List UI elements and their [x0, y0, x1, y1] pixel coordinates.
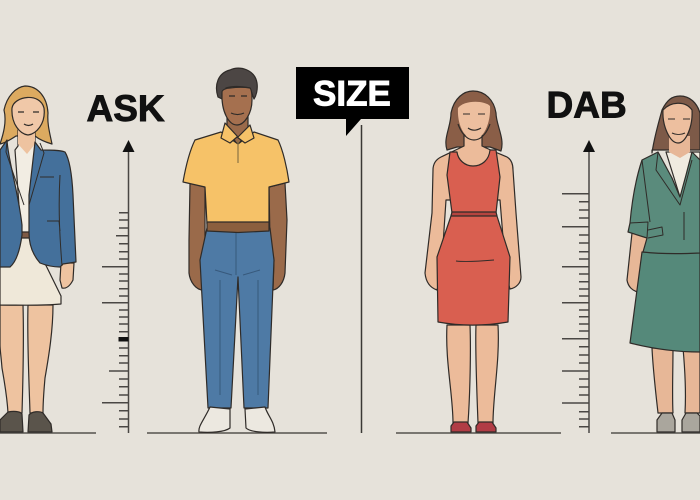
- shoes: [199, 407, 275, 432]
- belt: [21, 232, 31, 238]
- legs: [0, 305, 53, 413]
- collar: [221, 123, 254, 143]
- face details: [668, 119, 690, 134]
- label: SIZE callout: [296, 67, 409, 136]
- dress: [437, 150, 510, 325]
- figure: man in yellow polo and blue trousers: [183, 68, 289, 432]
- heading: ASK: ASK: [86, 88, 165, 129]
- label: SIZE callout: SIZE: [313, 74, 391, 114]
- dress fold: [456, 260, 494, 261]
- face: [663, 103, 692, 143]
- legs: [447, 325, 498, 423]
- blazer details: [6, 140, 62, 266]
- blazer: [0, 140, 76, 267]
- neck: [669, 136, 690, 158]
- legs: [652, 348, 700, 413]
- figure: woman in blue blazer and cream skirt: [0, 86, 76, 432]
- shoes: [657, 413, 700, 432]
- jacket details: [630, 152, 692, 240]
- skirt: [0, 233, 61, 305]
- face details: [18, 112, 39, 126]
- hair: [446, 91, 502, 151]
- placket: [237, 140, 239, 163]
- shoes: [0, 411, 52, 432]
- face: [458, 102, 490, 140]
- ruler: left scale: [102, 140, 134, 433]
- neck: [227, 115, 248, 146]
- face details: [229, 96, 247, 114]
- belt: [207, 222, 269, 232]
- face: [12, 97, 44, 135]
- figure: woman in red dress: [425, 91, 521, 432]
- belt: [451, 212, 497, 216]
- neck, shoulders and arms: [425, 135, 521, 290]
- face details: [463, 114, 485, 130]
- shoes: [451, 422, 496, 432]
- figure: woman in green jacket and skirt: [627, 96, 700, 432]
- arm and hand: [627, 233, 648, 292]
- hair: [0, 86, 52, 144]
- polo shirt: [183, 132, 289, 224]
- skirt: [630, 252, 700, 352]
- hair: [652, 96, 700, 153]
- ground lines: [0, 432, 700, 434]
- neck and shirt: [15, 130, 37, 233]
- ruler: right scale: [562, 140, 595, 433]
- center divider line: [360, 125, 362, 433]
- heading: DAB: DAB: [546, 84, 627, 126]
- shirt: [666, 152, 700, 197]
- trouser creases: [215, 232, 260, 395]
- hand: [60, 263, 74, 288]
- face: [222, 87, 252, 125]
- hair: [216, 68, 257, 99]
- jacket: [628, 152, 700, 254]
- arms: [189, 183, 287, 290]
- trousers: [200, 228, 274, 408]
